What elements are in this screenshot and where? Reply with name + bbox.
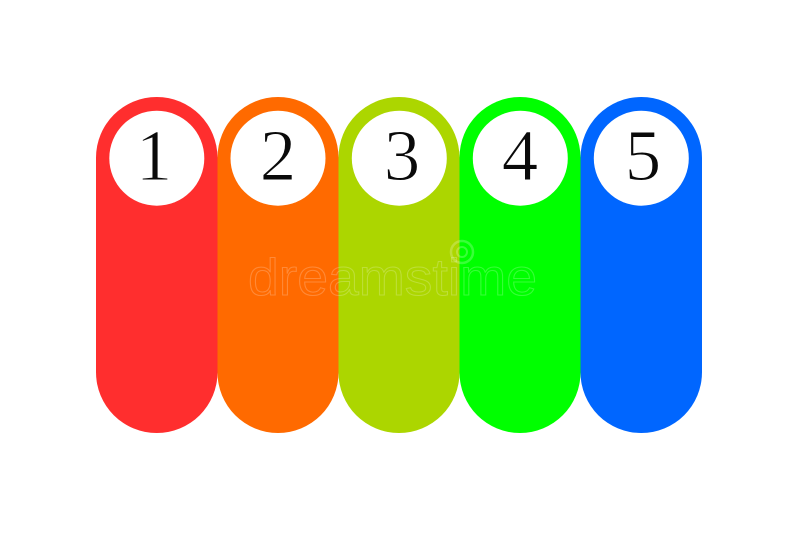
- pill 2: orange: 2: [260, 115, 296, 196]
- pill 2: orange: [218, 97, 338, 433]
- pill 3: lime: 3: [384, 115, 420, 196]
- pill 4: green: [460, 97, 580, 433]
- pill 1: red: 1: [136, 115, 172, 196]
- pill 1: red: [96, 97, 218, 433]
- pill 4: green: 4: [502, 115, 538, 196]
- pill 3: lime: [338, 97, 460, 433]
- watermark: dreamstime: [248, 249, 537, 307]
- pill 5: blue: 5: [625, 115, 661, 196]
- pill 5: blue: [580, 97, 702, 433]
